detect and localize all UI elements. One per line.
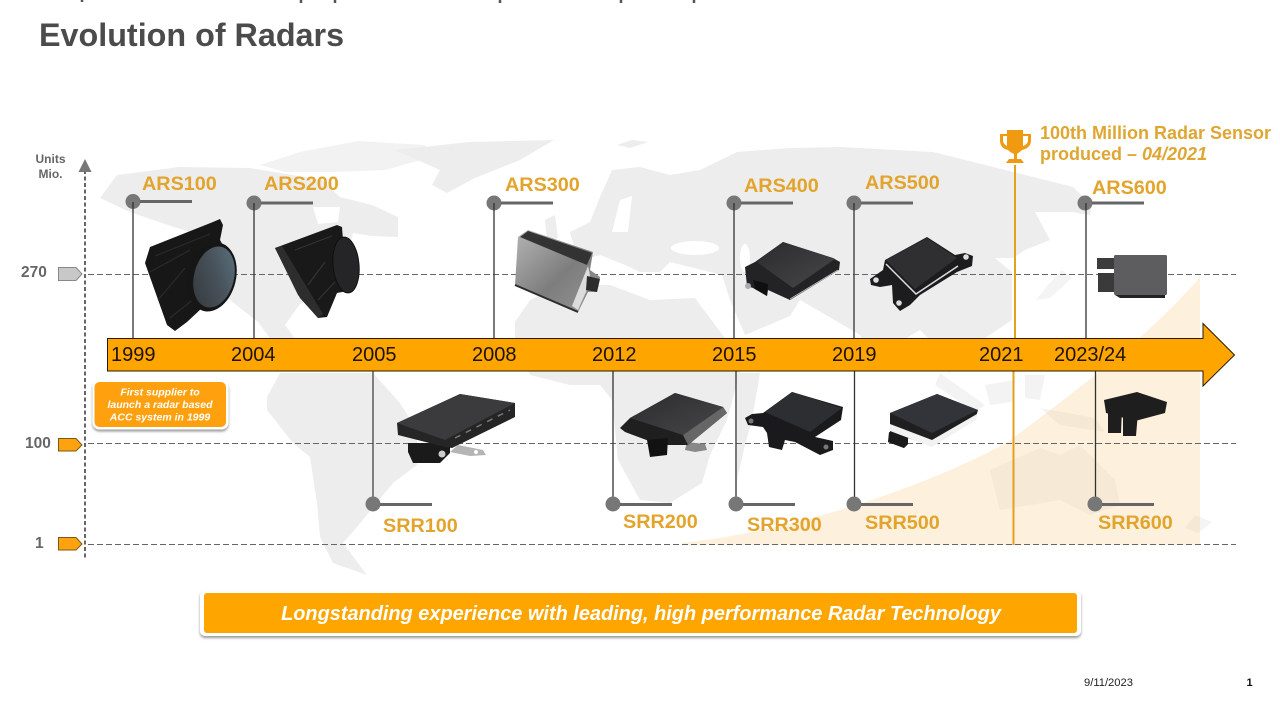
timeline years: 2021 [979,344,1024,366]
clipped header remnants [82,0,694,3]
trophy icon [1000,130,1031,163]
timeline years: 2005 [352,344,396,366]
timeline marker: SRR300: SRR300 [747,514,822,536]
dashed level lines [88,274,1236,544]
callout: first supplier: ACC system in 1999 [109,412,210,424]
footer date: 9/11/2023 [1084,677,1133,689]
axis marker 100: 100 [25,435,51,452]
timeline marker: ARS500: ARS500 [865,172,940,194]
footer page number: 1 [1246,677,1253,689]
axis marker 1: 1 [35,535,44,552]
y axis: Units [36,152,66,166]
callout: first supplier: First supplier to [120,386,200,398]
callout: first supplier: launch a radar based [107,399,213,411]
timeline years: 1999 [111,344,156,366]
timeline marker: ARS300 [486,174,580,338]
timeline marker: SRR600 [1088,371,1173,534]
sensor: SRR100 [397,394,515,463]
timeline marker: ARS200: ARS200 [264,173,339,195]
callout: first supplier [92,380,228,430]
timeline marker: SRR300 [728,371,822,536]
timeline marker: ARS200 [246,173,339,338]
timeline marker: ARS300: ARS300 [505,174,580,196]
sensor: SRR600 [1104,392,1167,436]
sensor: SRR300 [745,392,843,455]
sensor: ARS200 [275,225,361,318]
milestone caption: 100th Million Radar Sensor [1040,123,1271,143]
timeline years: 2008 [472,344,516,366]
sensor: SRR500 [888,394,978,448]
title: Evolution of Radars [39,17,344,53]
growth wedge [682,277,1200,545]
y axis: Mio. [38,167,62,181]
banner: key message: Longstanding experience with leading, high performance Radar Technology [281,603,1002,625]
milestone caption: produced – 04/2021 [1040,144,1207,164]
timeline years: 2019 [832,344,876,366]
world map background [100,140,1212,575]
timeline marker: ARS100: ARS100 [142,173,217,195]
timeline marker: ARS500 [846,172,940,338]
sensor: ARS400 [745,242,840,300]
timeline marker: SRR100 [366,371,458,537]
milestone caption [1040,123,1271,164]
banner: key message [200,590,1081,636]
timeline arrow [108,324,1234,386]
map water gaps [313,196,750,345]
timeline marker: ARS400: ARS400 [744,175,819,197]
sensor: ARS300 [515,230,600,312]
sensor: ARS500 [870,237,973,311]
timeline marker: SRR500 [846,371,940,534]
timeline marker: SRR200: SRR200 [623,511,698,533]
timeline marker: SRR100: SRR100 [383,515,458,537]
axis marker 1 [35,535,82,552]
timeline years: 2004 [231,344,276,366]
timeline marker: SRR200 [606,371,698,533]
axis marker 270: 270 [21,264,47,281]
timeline years: 2012 [592,344,636,366]
axis marker 100 [25,435,82,452]
timeline years: 2023/24 [1054,344,1126,366]
timeline marker: SRR600: SRR600 [1098,512,1173,534]
timeline marker: ARS100 [126,173,217,338]
timeline marker: ARS600: ARS600 [1092,177,1167,199]
timeline marker: ARS400 [726,175,819,338]
sensor: SRR200 [620,393,727,457]
milestone line 2021 [1014,165,1015,545]
y axis [36,152,92,558]
timeline marker: ARS600 [1078,177,1167,338]
axis marker 270 [21,264,82,281]
sensor: ARS600 [1097,255,1167,298]
timeline years: 2015 [712,344,756,366]
timeline marker: SRR500: SRR500 [865,512,940,534]
sensor: ARS100 [145,219,244,331]
timeline years [111,344,1126,366]
